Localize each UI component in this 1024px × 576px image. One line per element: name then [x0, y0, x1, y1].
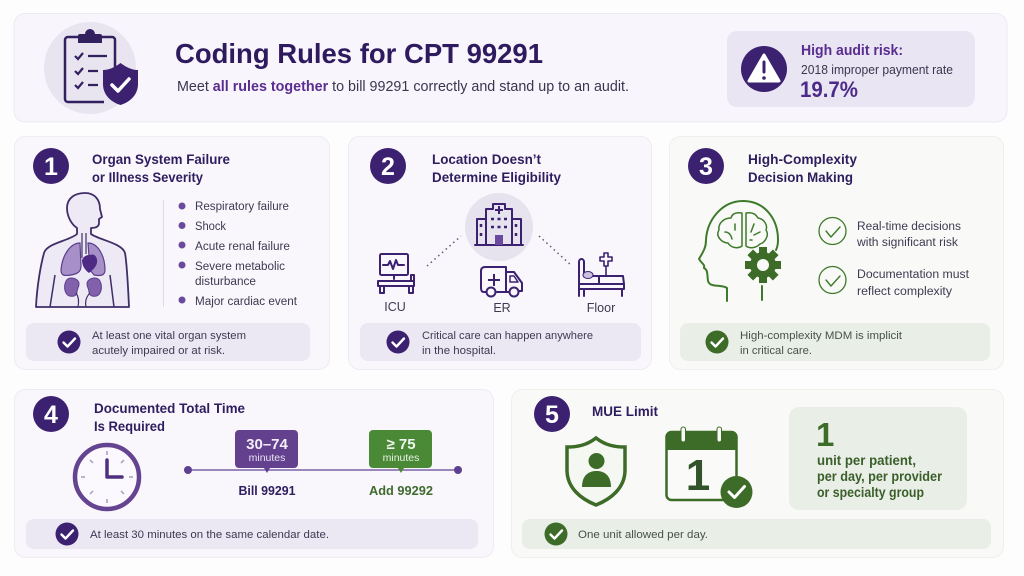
- callout: one unit: 1: [816, 416, 834, 453]
- badge 4: 4: [44, 401, 58, 429]
- label Add 99292: Add 99292: [369, 483, 433, 498]
- list of conditions: [178, 201, 298, 308]
- checklist: Documentation must: [857, 269, 970, 281]
- badge 3: 3: [699, 153, 713, 181]
- heading: Location Doesn’t: [432, 152, 541, 167]
- label ER: ER: [493, 301, 511, 315]
- heading: Organ System Failure: [92, 152, 230, 167]
- list of conditions: Respiratory failure: [195, 201, 289, 213]
- badge 1: [33, 148, 69, 184]
- icon: shield with person: [567, 438, 625, 505]
- list of conditions: Major cardiac event: [195, 296, 298, 308]
- badge 1: 1: [44, 153, 58, 181]
- icon: hospital bed: [579, 253, 624, 296]
- icon: human torso with organs: [36, 193, 129, 307]
- panel: location: [348, 136, 652, 370]
- icon: ICU monitor: [378, 254, 414, 293]
- badge 3: [688, 148, 724, 184]
- panel: organ system failure: [14, 136, 330, 370]
- label Bill 99291: Bill 99291: [238, 483, 296, 498]
- marker: 30-74 minutes: minutes: [249, 452, 285, 464]
- marker: 75 plus minutes: [369, 430, 432, 473]
- list of conditions: Shock: [195, 221, 226, 233]
- callout: one unit: unit per patient,: [817, 453, 916, 468]
- heading: Documented Total Time: [94, 401, 245, 416]
- badge 4: [33, 396, 69, 432]
- subtitle: Meet all rules together to bill 99291 correctly and stand up to an audit.: [177, 79, 629, 95]
- takeaway strip: [522, 519, 991, 549]
- panel: MUE limit: [512, 390, 1004, 558]
- takeaway strip: Critical care can happen anywhere: [422, 330, 593, 342]
- takeaway strip: in the hospital.: [422, 345, 496, 357]
- dotted connectors: [427, 236, 572, 266]
- heading: Is Required: [94, 419, 165, 434]
- badge 5: [534, 396, 570, 432]
- icon: ambulance: [481, 267, 522, 296]
- checklist: reflect complexity: [857, 286, 952, 298]
- callout: one unit: per day, per provider: [817, 469, 943, 484]
- takeaway strip: One unit allowed per day.: [578, 529, 708, 541]
- badge 2: 2: [381, 153, 395, 181]
- badge 2: [370, 148, 406, 184]
- heading: or Illness Severity: [92, 170, 203, 185]
- heading: High-Complexity: [748, 152, 857, 167]
- panel: high complexity decision making: [670, 136, 1004, 370]
- timeline: [184, 430, 462, 498]
- panel: documented total time: [14, 390, 494, 558]
- callout: one unit: [789, 407, 967, 510]
- header panel: [14, 14, 1007, 122]
- marker: 75 plus minutes: minutes: [383, 452, 419, 464]
- takeaway strip: [360, 323, 641, 361]
- heading: MUE Limit: [592, 404, 659, 419]
- checklist: [819, 218, 970, 298]
- takeaway strip: acutely impaired or at risk.: [92, 345, 225, 357]
- checklist: Real-time decisions: [857, 221, 961, 233]
- callout: high audit risk: High audit risk:: [801, 42, 903, 59]
- badge 5: 5: [545, 401, 559, 429]
- label Floor: Floor: [587, 301, 615, 315]
- callout: high audit risk: 19.7%: [800, 77, 858, 102]
- marker: 30-74 minutes: [235, 430, 298, 473]
- takeaway strip: At least one vital organ system: [92, 330, 246, 342]
- callout: one unit: or specialty group: [817, 485, 924, 500]
- heading: Determine Eligibility: [432, 170, 561, 185]
- takeaway strip: [26, 323, 310, 361]
- checklist: with significant risk: [856, 237, 958, 249]
- icon: calendar: 1: [686, 451, 710, 500]
- list of conditions: disturbance: [195, 276, 256, 288]
- takeaway strip: At least 30 minutes on the same calendar date.: [90, 529, 329, 541]
- takeaway strip: High-complexity MDM is implicit: [740, 330, 902, 342]
- callout: high audit risk: [727, 31, 975, 107]
- list of conditions: Acute renal failure: [195, 241, 290, 253]
- takeaway strip: [26, 519, 478, 549]
- list of conditions: Severe metabolic: [195, 261, 285, 273]
- icon: head with brain and gear: [699, 201, 781, 301]
- marker: 30-74 minutes: 30–74: [246, 436, 289, 453]
- heading: Decision Making: [748, 170, 853, 185]
- icon: hospital: [465, 193, 533, 261]
- marker: 75 plus minutes: ≥ 75: [386, 436, 416, 453]
- takeaway strip: in critical care.: [740, 345, 812, 357]
- icon: warning: [741, 46, 787, 92]
- takeaway strip: [680, 323, 990, 361]
- icon: clock: [75, 445, 139, 509]
- icon: clipboard with shield: [44, 22, 138, 114]
- title: Coding Rules for CPT 99291: [175, 38, 543, 69]
- label ICU: ICU: [384, 300, 406, 314]
- icon: calendar: [666, 427, 752, 508]
- callout: high audit risk: 2018 improper payment rate: [801, 63, 953, 77]
